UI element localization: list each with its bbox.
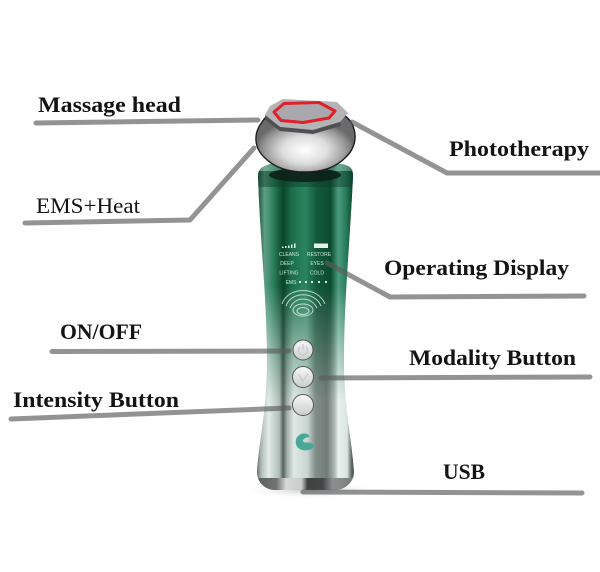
display labels: RESTORE <box>307 252 332 258</box>
display labels <box>279 252 332 286</box>
level dots <box>299 281 327 283</box>
display labels: LIFTING <box>279 270 299 276</box>
line: massage head <box>36 120 258 123</box>
brand logo <box>297 435 313 449</box>
display labels: DEEP <box>280 261 294 267</box>
display labels: COLD <box>310 270 324 276</box>
label: USB: USB <box>443 459 485 484</box>
power button <box>293 340 313 360</box>
label: Operating Display: Operating Display <box>384 255 569 280</box>
mode icon <box>314 244 328 248</box>
mode button <box>292 366 314 388</box>
line: intensity <box>11 408 289 419</box>
display labels: EYES <box>310 261 324 267</box>
line: phototherapy <box>352 122 600 173</box>
label: ON/OFF: ON/OFF <box>60 319 142 344</box>
label: Intensity Button: Intensity Button <box>13 387 179 412</box>
wave emblem <box>282 290 325 316</box>
phototherapy octagon <box>274 102 335 122</box>
display labels: EMS <box>286 280 297 286</box>
signal bars <box>282 244 296 248</box>
operating display <box>279 244 332 316</box>
line: modality <box>321 377 590 378</box>
label: EMS+Heat: EMS+Heat <box>36 193 140 218</box>
top plate <box>265 99 348 130</box>
line: operating display <box>327 263 584 297</box>
callout lines <box>11 120 600 493</box>
control buttons <box>292 340 314 416</box>
base shadow <box>240 481 380 499</box>
label: Phototherapy: Phototherapy <box>449 136 589 161</box>
label: Massage head: Massage head <box>38 92 181 117</box>
intensity button <box>292 394 314 416</box>
line: EMS+Heat <box>25 148 254 223</box>
label: Modality Button: Modality Button <box>409 345 576 370</box>
device body <box>257 164 354 490</box>
display labels: CLEANS <box>279 252 300 258</box>
device illustration <box>250 99 360 495</box>
line: ON/OFF <box>52 348 289 354</box>
massage head sphere <box>256 99 355 172</box>
line: USB <box>303 492 582 493</box>
